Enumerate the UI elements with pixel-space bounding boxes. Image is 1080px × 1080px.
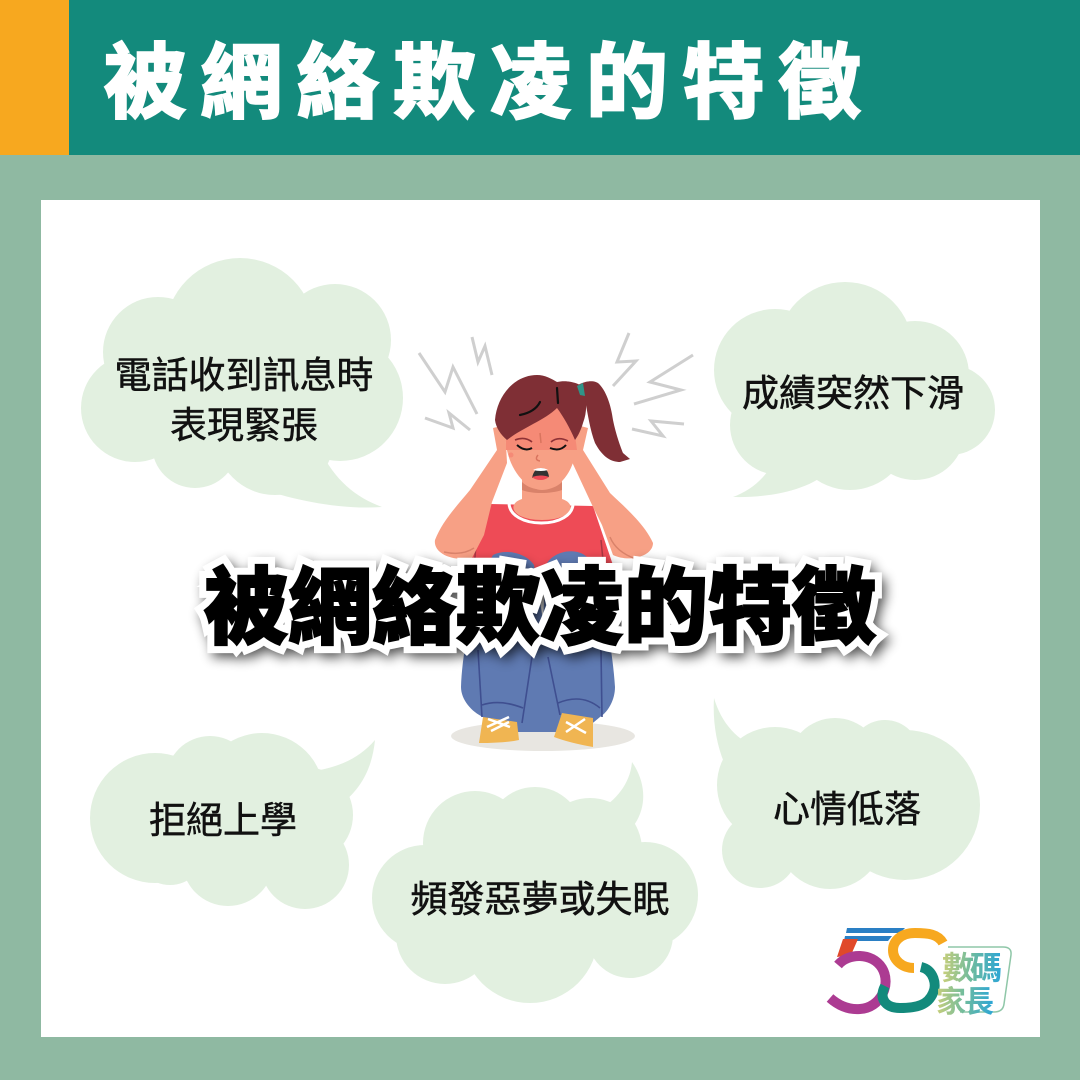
text: refuses school: 拒絕上學 — [149, 800, 297, 841]
legs — [461, 551, 615, 732]
speech cloud: phone messages: 表現緊張 — [170, 405, 318, 446]
text: grades drop: 成績突然下滑 — [742, 373, 964, 414]
logo: 家長 — [936, 986, 994, 1019]
logo: blue stripes — [844, 928, 905, 941]
speech cloud: phone messages — [81, 258, 403, 508]
center title: 被網絡欺凌的特徵 — [204, 561, 876, 655]
logo: frame — [948, 947, 1011, 1012]
center title: 被網絡欺凌的特徵 — [208, 566, 880, 660]
shoes — [479, 717, 519, 743]
text: phone messages: 電話收到訊息時 — [114, 355, 374, 396]
logo: orange arc — [893, 933, 943, 968]
logo: green arc — [883, 967, 935, 1008]
logo — [830, 928, 1011, 1019]
hair — [495, 375, 586, 440]
speech cloud: grades drop — [714, 282, 995, 497]
logo: red wedge — [837, 939, 858, 957]
face — [505, 395, 577, 490]
header bar — [0, 0, 1080, 155]
text: nightmares: 頻發惡夢或失眠 — [410, 879, 670, 920]
illustration: stressed girl — [419, 333, 693, 751]
speech cloud: nightmares — [372, 762, 698, 1003]
shadow ellipse — [451, 721, 635, 751]
neck — [513, 478, 571, 520]
logo: text: 數碼 — [942, 950, 1002, 986]
eyes, mouth — [517, 445, 566, 449]
text: low mood: 心情低落 — [773, 789, 921, 830]
center title: 被網絡欺凌的特徵 — [204, 561, 876, 655]
speech cloud: low mood — [714, 698, 980, 889]
speech cloud: refuses school — [90, 733, 375, 909]
white panel — [41, 200, 1040, 1037]
logo: purple five — [830, 956, 886, 1009]
torso — [465, 504, 618, 580]
ponytail — [578, 381, 630, 462]
arms — [435, 425, 507, 559]
title: 被網絡欺凌的特徵 — [104, 38, 875, 129]
lightning marks — [419, 333, 693, 436]
